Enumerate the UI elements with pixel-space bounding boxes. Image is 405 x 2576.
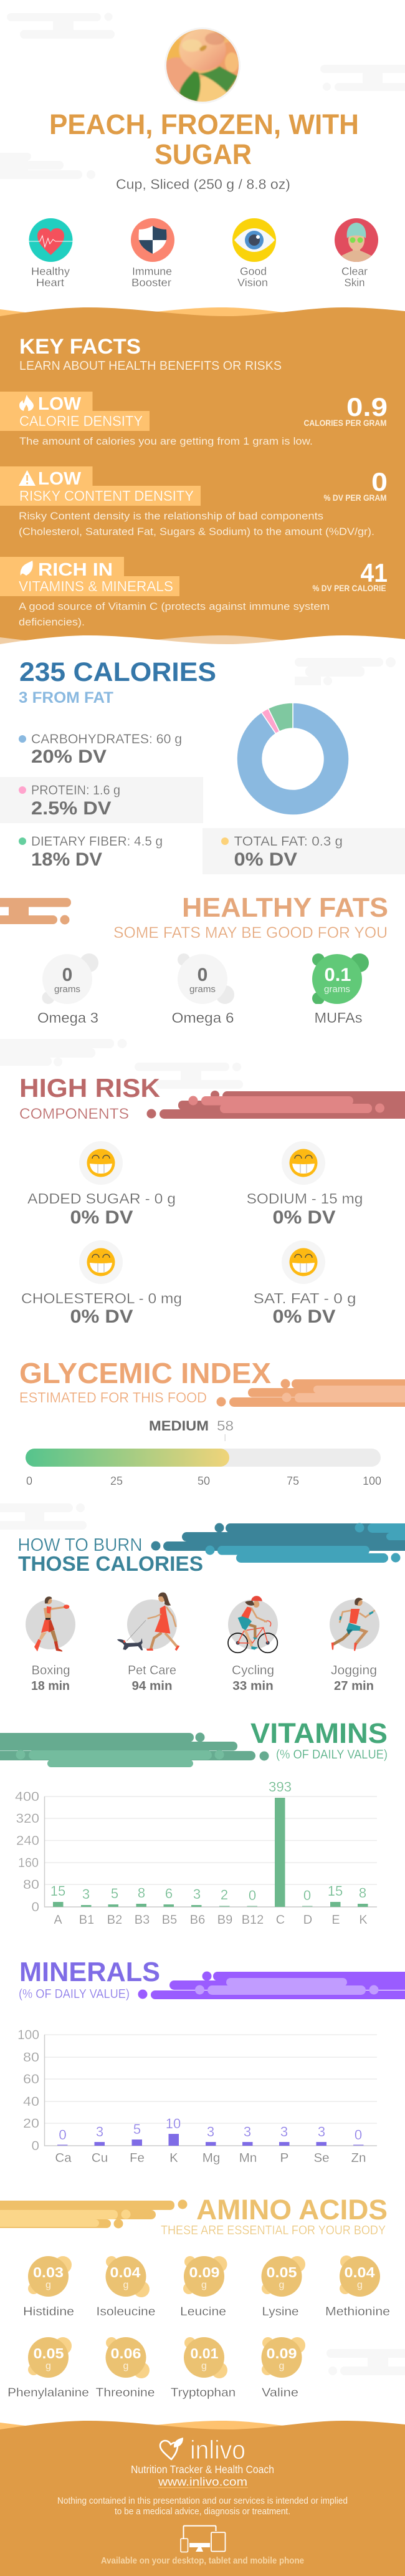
item: cholesterol: CHOLESTEROL - 0 mg — [21, 1290, 182, 1306]
chart: minerals bar chart: 100 — [17, 2028, 39, 2042]
chart: vitamins bar chart: 15 — [328, 1883, 343, 1899]
chart: vitamins bar chart: 0 — [31, 1900, 39, 1914]
chart: vitamins bar chart: 2 — [221, 1887, 228, 1903]
legend: dietary fiber: 18% DV — [31, 849, 102, 870]
icon: devices — [181, 2525, 226, 2552]
stat: mufas: 0.1 — [324, 965, 351, 985]
amino: isoleucine: g — [123, 2280, 128, 2290]
subtitle: Cup, Sliced (250 g / 8.8 oz) — [116, 176, 290, 192]
logo: inlivo: inlivo — [190, 2435, 245, 2464]
gauge scale: 75 — [287, 1475, 299, 1487]
heading: vitamins: VITAMINS — [250, 1717, 388, 1749]
chart: vitamins bar chart: 0 — [249, 1888, 256, 1903]
disclaimer: Nothing contained in this presentation and our services is intended or implied — [57, 2496, 348, 2506]
chart: vitamins bar chart: 8 — [138, 1885, 145, 1901]
chart: vitamins bar chart: 0 — [303, 1888, 311, 1903]
fact: rich in vitamins and minerals: deficiencies). — [19, 616, 85, 628]
fact: rich in vitamins and minerals: 41 — [360, 558, 388, 587]
icon: healthy heart — [29, 218, 72, 262]
chart: minerals bar chart: 3 — [318, 2124, 325, 2139]
stat: omega 6: 0 — [198, 965, 207, 985]
legend: carbohydrates: 20% DV — [31, 746, 107, 767]
decoration: blob — [138, 1972, 405, 1999]
stat: omega 6: Omega 6 — [172, 1010, 234, 1026]
item: sodium — [247, 1141, 363, 1228]
decoration: blob — [0, 898, 71, 924]
legend: dietary fiber: DIETARY FIBER: 4.5 g — [31, 834, 163, 849]
label: good vision: Vision — [237, 276, 268, 289]
stat: mufas — [312, 953, 369, 1026]
legend: protein: PROTEIN: 1.6 g — [31, 783, 120, 798]
wave: bottom edge — [0, 635, 405, 652]
amino: lysine: g — [279, 2280, 284, 2290]
activity: jogging: 27 min — [334, 1679, 374, 1693]
chart: vitamins bar chart — [15, 1779, 377, 1927]
legend: carbohydrates — [19, 732, 182, 767]
heading: minerals: (% OF DAILY VALUE) — [19, 1987, 130, 2001]
item: sodium: 0% DV — [273, 1207, 335, 1228]
amino: methionine — [325, 2255, 390, 2318]
amino: isoleucine: Isoleucine — [96, 2305, 156, 2318]
chart: vitamins bar chart: 15 — [50, 1883, 65, 1899]
activity: pet care: 94 min — [132, 1679, 172, 1693]
activity: cycling: 33 min — [232, 1679, 274, 1693]
chart: minerals bar chart: P — [280, 2151, 288, 2165]
activity: jogging — [330, 1598, 379, 1693]
gauge scale — [26, 1475, 381, 1487]
heading: healthy fats: HEALTHY FATS — [182, 892, 388, 923]
tagline — [131, 2463, 274, 2488]
legend: total fat: TOTAL FAT: 0.3 g — [234, 834, 343, 849]
heading: how to burn: THOSE CALORIES — [18, 1552, 203, 1575]
chart: vitamins bar chart: 160 — [18, 1856, 39, 1870]
label: clear skin: Clear — [341, 265, 368, 277]
icon: warning triangle — [19, 470, 36, 486]
chart: minerals bar chart: 10 — [166, 2116, 181, 2131]
amino: threonine — [96, 2337, 155, 2400]
heading: minerals — [19, 1957, 160, 2001]
disclaimer — [57, 2496, 348, 2517]
label: healthy heart: Healthy — [31, 265, 70, 277]
amino: isoleucine: 0.04 — [110, 2264, 141, 2280]
item: saturated fat: SAT. FAT - 0 g — [253, 1290, 356, 1306]
panel: key facts — [0, 307, 405, 652]
amino: leucine: g — [201, 2280, 207, 2290]
chart: vitamins bar chart: 80 — [23, 1878, 39, 1892]
amino: threonine: 0.06 — [111, 2345, 141, 2361]
fact: rich in vitamins and minerals: RICH IN — [38, 560, 113, 580]
gauge label: medium 58: MEDIUM — [149, 1418, 209, 1434]
activity: pet care — [117, 1593, 179, 1693]
chart: minerals bar chart — [17, 2028, 377, 2165]
amino: valine: 0.09 — [267, 2345, 297, 2361]
stat: omega 3 — [37, 953, 98, 1026]
wave: top edge — [0, 307, 405, 652]
label: immune booster: Immune — [132, 265, 172, 277]
chart: vitamins bar chart: B9 — [217, 1913, 232, 1927]
amino: lysine: 0.05 — [267, 2264, 297, 2280]
amino: leucine — [180, 2256, 227, 2318]
chart: vitamins bar chart: B6 — [190, 1913, 205, 1927]
amino: threonine: Threonine — [96, 2386, 155, 2400]
legend: total fat: 0% DV — [234, 849, 297, 870]
chart: minerals bar chart: 3 — [244, 2124, 251, 2139]
heading: healthy fats: SOME FATS MAY BE GOOD FOR YOU — [113, 924, 388, 942]
fact: rich in vitamins and minerals: VITAMINS & MINERALS — [19, 578, 173, 594]
chart: vitamins bar chart: B1 — [79, 1913, 94, 1927]
heading: glycemic index: ESTIMATED FOR THIS FOOD — [19, 1389, 207, 1406]
fact: risky content density: RISKY CONTENT DENSITY — [19, 488, 194, 504]
legend: total fat — [202, 828, 405, 874]
chart: vitamins bar chart: 240 — [16, 1833, 39, 1848]
amino: histidine: 0.03 — [33, 2264, 64, 2280]
title: PEACH, FROZEN, WITH — [49, 109, 359, 140]
title — [49, 109, 359, 170]
amino: lysine — [262, 2256, 305, 2318]
amino: valine: Valine — [262, 2386, 298, 2400]
amino: phenylalanine: 0.05 — [34, 2345, 64, 2361]
label: healthy heart — [31, 265, 70, 289]
amino: histidine: Histidine — [23, 2305, 74, 2318]
decoration: blob — [147, 1091, 405, 1119]
chart: minerals bar chart: 3 — [96, 2124, 103, 2139]
title: SUGAR — [155, 138, 252, 170]
amino: lysine: Lysine — [262, 2305, 299, 2318]
chart: vitamins bar chart: B12 — [242, 1913, 264, 1927]
amino: phenylalanine — [7, 2337, 89, 2400]
chart: vitamins bar chart: B5 — [162, 1913, 177, 1927]
amino: leucine: Leucine — [180, 2305, 226, 2318]
fact: risky content density: LOW — [38, 469, 82, 489]
stat: omega 3: grams — [54, 984, 80, 995]
amino: valine — [262, 2337, 305, 2400]
heading: how to burn: HOW TO BURN — [17, 1535, 142, 1555]
panel: header — [29, 25, 378, 289]
amino: methionine: Methionine — [325, 2305, 390, 2318]
fact: calorie density: The amount of calories you are getting from 1 gram is low. — [19, 435, 313, 447]
chart: vitamins bar chart: B3 — [135, 1913, 150, 1927]
legend: protein: 2.5% DV — [31, 798, 111, 819]
item: saturated fat: 0% DV — [273, 1306, 335, 1327]
chart: minerals bar chart: 80 — [23, 2050, 39, 2065]
stat: omega 3: 0 — [62, 965, 72, 985]
fact: risky content density: % DV PER GRAM — [324, 493, 386, 503]
chart: vitamins bar chart: 320 — [16, 1811, 39, 1826]
stat: omega 6: grams — [189, 984, 216, 995]
heading: glycemic index — [19, 1357, 271, 1406]
item: cholesterol — [21, 1240, 182, 1327]
heading: vitamins — [250, 1717, 388, 1762]
panel: high risk components — [19, 1073, 405, 1327]
chart: minerals bar chart: 60 — [23, 2072, 39, 2086]
availability note: Available on your desktop, tablet and mobile phone — [101, 2556, 304, 2566]
chart: minerals bar chart: 0 — [31, 2139, 39, 2153]
heading: high risk — [19, 1073, 160, 1122]
decoration: blob — [217, 1379, 405, 1407]
amino: phenylalanine: Phenylalanine — [7, 2386, 89, 2400]
label: clear skin — [341, 265, 368, 289]
chart: vitamins bar chart: 393 — [269, 1779, 292, 1795]
chart: vitamins bar chart: 3 — [193, 1886, 201, 1902]
chart: minerals bar chart: Mg — [202, 2151, 220, 2165]
amino: tryptophan: Tryptophan — [171, 2386, 236, 2400]
label: immune booster — [131, 265, 172, 289]
amino: methionine: 0.04 — [344, 2264, 375, 2280]
chart: minerals bar chart: K — [169, 2151, 178, 2165]
amino: histidine — [23, 2256, 74, 2318]
heading: how to burn — [17, 1535, 203, 1575]
heading: minerals: MINERALS — [19, 1957, 160, 1987]
icon: leaf — [21, 561, 33, 576]
amino: leucine: 0.09 — [189, 2264, 219, 2280]
legend: carbohydrates: CARBOHYDRATES: 60 g — [31, 732, 182, 746]
amino: isoleucine — [96, 2256, 156, 2318]
activity: cycling: Cycling — [232, 1664, 274, 1677]
amino: methionine: g — [357, 2280, 363, 2290]
heading: glycemic index: GLYCEMIC INDEX — [19, 1357, 271, 1389]
chart: minerals bar chart: 5 — [133, 2121, 141, 2137]
heading: 235 calories — [19, 657, 216, 707]
chart: minerals bar chart: 0 — [59, 2127, 67, 2143]
activity: pet care: Pet Care — [128, 1664, 176, 1677]
fact: risky content density: 0 — [371, 467, 388, 496]
item: sodium: SODIUM - 15 mg — [247, 1190, 363, 1207]
item: added sugar: 0% DV — [70, 1207, 133, 1228]
chart: vitamins bar chart: A — [54, 1913, 62, 1927]
legend: dietary fiber — [19, 834, 163, 870]
fact: risky content density: Risky Content density is the relationship of bad components — [19, 510, 323, 522]
item: cholesterol: 0% DV — [70, 1306, 133, 1327]
fact: rich in vitamins and minerals: A good source of Vitamin C (protects against immune system — [19, 601, 330, 612]
gauge label: medium 58 — [149, 1418, 234, 1441]
fact: risky content density: (Cholesterol, Saturated Fat, Sugars & Sodium) to the amount (%DV/gr). — [19, 526, 374, 538]
gauge bar — [26, 1449, 381, 1467]
chart: minerals bar chart: Ca — [55, 2151, 72, 2165]
activity: boxing — [26, 1596, 75, 1693]
activity: boxing: Boxing — [31, 1664, 70, 1677]
tagline: Nutrition Tracker & Health Coach — [131, 2463, 274, 2476]
chart: minerals bar chart: 3 — [207, 2124, 214, 2139]
gauge scale: 0 — [26, 1475, 32, 1487]
heading: 235 calories: 3 FROM FAT — [19, 689, 113, 707]
chart: vitamins bar chart: 6 — [165, 1886, 173, 1901]
panel: glycemic index — [19, 1357, 405, 1487]
decoration: blob — [151, 1523, 405, 1563]
panel: healthy fats — [0, 892, 388, 1026]
disclaimer: to be a medical advice, diagnosis or treatment. — [115, 2506, 290, 2517]
chart: macronutrient donut — [237, 703, 349, 815]
label: good vision: Good — [240, 265, 267, 277]
icon: peach photo — [164, 27, 241, 104]
panel: calories — [0, 657, 405, 874]
chart: vitamins bar chart: D — [303, 1913, 312, 1927]
chart: vitamins bar chart: K — [359, 1913, 368, 1927]
panel: footer — [0, 2421, 405, 2576]
chart: minerals bar chart: 3 — [280, 2124, 288, 2139]
activity: cycling — [228, 1596, 278, 1693]
fact: calorie density: CALORIE DENSITY — [19, 413, 143, 429]
stat: omega 6 — [172, 953, 234, 1026]
panel: amino acids — [0, 2194, 390, 2400]
chart: minerals bar chart: Se — [313, 2151, 330, 2165]
stat: mufas: MUFAs — [314, 1010, 363, 1026]
panel: minerals — [17, 1957, 405, 2165]
item: added sugar — [27, 1141, 176, 1228]
stat: omega 3: Omega 3 — [37, 1010, 98, 1026]
chart: minerals bar chart: Cu — [92, 2151, 108, 2165]
chart: vitamins bar chart: E — [331, 1913, 340, 1927]
stat: mufas: grams — [324, 984, 350, 995]
icon: clear skin — [335, 218, 378, 262]
item: added sugar: ADDED SUGAR - 0 g — [27, 1190, 176, 1207]
heading: key facts — [19, 335, 282, 373]
chart: vitamins bar chart: 5 — [111, 1886, 118, 1901]
fact: rich in vitamins and minerals: % DV PER CALORIE — [313, 583, 386, 593]
chart: minerals bar chart: 0 — [355, 2127, 362, 2143]
heading: vitamins: (% OF DAILY VALUE) — [276, 1748, 388, 1762]
amino: histidine: g — [45, 2280, 51, 2290]
fact: risky content density — [0, 466, 388, 538]
chart: minerals bar chart: 20 — [23, 2116, 39, 2131]
chart: minerals bar chart: Fe — [130, 2151, 145, 2165]
tagline: www.inlivo.com — [158, 2476, 247, 2488]
heading: amino acids: THESE ARE ESSENTIAL FOR YOUR BODY — [161, 2224, 386, 2237]
gauge scale: 25 — [110, 1475, 123, 1487]
fact: calorie density: 0.9 — [346, 392, 388, 422]
fact: calorie density: CALORIES PER GRAM — [304, 418, 386, 428]
gauge label: medium 58: 58 — [217, 1418, 234, 1434]
chart: vitamins bar chart: B2 — [107, 1913, 122, 1927]
chart: minerals bar chart: Mn — [239, 2151, 257, 2165]
gauge scale: 50 — [198, 1475, 210, 1487]
heading: amino acids: AMINO ACIDS — [196, 2194, 388, 2226]
icon: immune booster — [131, 218, 174, 262]
decoration: blob — [0, 2200, 187, 2229]
amino: tryptophan: g — [201, 2361, 207, 2371]
chart: vitamins bar chart: 400 — [15, 1790, 39, 1804]
heading: key facts: LEARN ABOUT HEALTH BENEFITS OR RISKS — [19, 359, 282, 373]
gauge scale: 100 — [363, 1475, 381, 1487]
chart: vitamins bar chart: 8 — [359, 1885, 366, 1901]
amino: threonine: g — [123, 2361, 128, 2371]
chart: vitamins bar chart: 3 — [82, 1886, 90, 1902]
item: saturated fat — [253, 1240, 356, 1327]
chart: minerals bar chart: 40 — [23, 2095, 39, 2109]
label: healthy heart: Heart — [36, 276, 64, 289]
heading: healthy fats — [113, 892, 388, 942]
activity: jogging: Jogging — [331, 1664, 377, 1677]
chart: vitamins bar chart: C — [276, 1913, 285, 1927]
wave: footer edge — [0, 2421, 405, 2576]
amino: tryptophan — [171, 2337, 236, 2400]
heading: amino acids — [161, 2194, 388, 2237]
amino: phenylalanine: g — [45, 2361, 51, 2371]
label: clear skin: Skin — [344, 276, 365, 289]
panel: vitamins — [0, 1717, 388, 1927]
heading: key facts: KEY FACTS — [19, 335, 141, 359]
icon: flame — [19, 395, 34, 411]
label: good vision — [237, 265, 268, 289]
amino: valine: g — [279, 2361, 284, 2371]
label: immune booster: Booster — [131, 276, 171, 289]
decoration: blob — [0, 1732, 269, 1767]
fact: calorie density: LOW — [38, 394, 82, 414]
chart: minerals bar chart: Zn — [351, 2151, 366, 2165]
amino: tryptophan: 0.01 — [191, 2345, 219, 2361]
activity: boxing: 18 min — [31, 1679, 70, 1693]
legend: protein — [0, 777, 203, 823]
panel: how to burn those calories — [17, 1523, 405, 1693]
fact: rich in vitamins and minerals — [0, 557, 388, 628]
heading: high risk: COMPONENTS — [19, 1106, 129, 1122]
icon: good vision — [232, 218, 276, 262]
heading: high risk: HIGH RISK — [19, 1073, 160, 1102]
fact: calorie density — [0, 392, 388, 447]
heading: 235 calories: 235 CALORIES — [19, 657, 216, 687]
logo: inlivo — [160, 2435, 245, 2464]
